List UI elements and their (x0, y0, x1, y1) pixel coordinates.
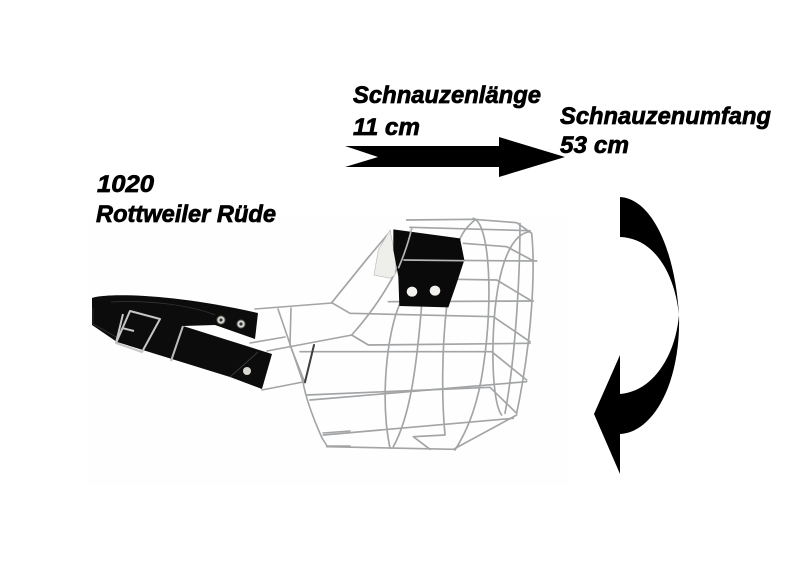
label: dog breed: Rottweiler Rüde (96, 201, 276, 228)
label: dog breed (96, 171, 276, 228)
label: muzzle length (353, 82, 541, 141)
label: dog breed: 1020 (97, 171, 155, 198)
label: muzzle length: 11 cm (353, 114, 420, 141)
label: muzzle length: Schnauzenlänge (353, 82, 541, 109)
label: muzzle circumference: 53 cm (560, 132, 629, 159)
label: muzzle circumference: Schnauzenumfang (560, 103, 771, 130)
wire cage: snout end (250, 303, 352, 446)
arrow: length (345, 137, 565, 177)
wire cage (300, 218, 537, 450)
wire muzzle with straps (92, 218, 537, 450)
leather straps and buckle (92, 295, 272, 389)
label: muzzle circumference (560, 103, 771, 159)
leather nose plate (374, 228, 464, 307)
arrow: circumference (594, 197, 679, 474)
